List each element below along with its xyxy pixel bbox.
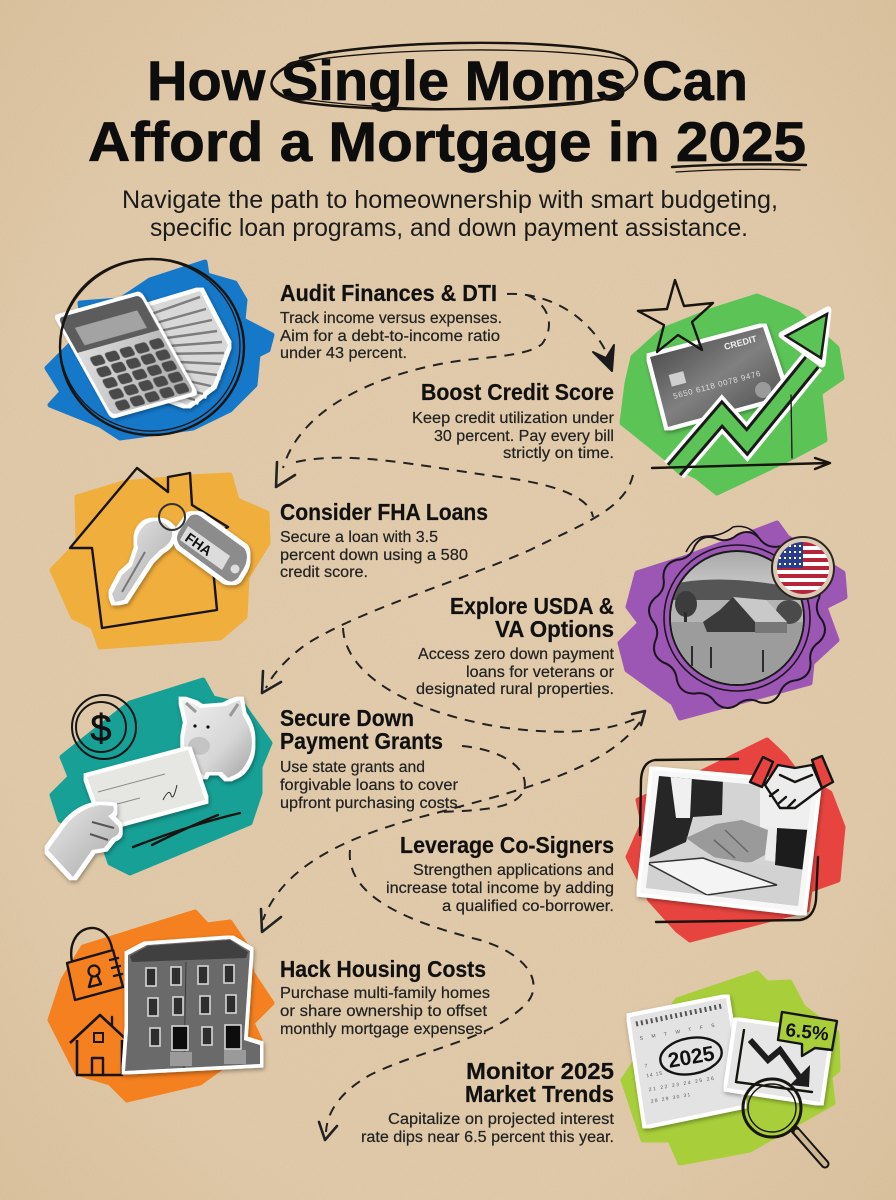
icon: bank check <box>87 750 205 827</box>
panel: step 5 down payment grants <box>48 680 270 877</box>
text: step 5: upfront purchasing costs. <box>280 795 462 812</box>
text: step 1 <box>280 280 502 362</box>
title: Afford a Mortgage in 2025 <box>88 110 806 173</box>
icon: star outline <box>638 280 713 352</box>
text: step 4: VA Options <box>495 616 614 642</box>
text: step 7: or share ownership to offset <box>280 1003 488 1020</box>
text: step 1: Track income versus expenses. <box>280 310 502 327</box>
text: step 2: Keep credit utilization under <box>412 410 614 427</box>
text: step 5: Use state grants and <box>280 759 425 776</box>
chart: falling rate <box>727 1021 830 1102</box>
subtitle: Navigate the path to homeownership with smart budgeting, <box>122 186 778 214</box>
text: step 5: Secure Down <box>280 705 414 731</box>
text: step 4: loans for veterans or <box>466 664 614 681</box>
icon: padlock sketch <box>67 928 123 1000</box>
red paint swatch <box>628 740 843 940</box>
icon: dollar coin: $ <box>90 708 112 750</box>
title <box>88 49 806 173</box>
dashed path: step 7 to step 8 <box>319 850 534 1140</box>
text: step 8: rate dips near 6.5 percent this year. <box>361 1129 614 1146</box>
text: step 8: Monitor 2025 <box>466 1058 614 1084</box>
icon: magnifier <box>743 1079 825 1164</box>
subtitle: specific loan programs, and down payment assistance. <box>150 214 748 242</box>
icon: credit card: CREDIT <box>723 333 758 352</box>
text: step 1: under 43 percent. <box>280 345 407 362</box>
text: step 3: credit score. <box>280 564 368 581</box>
2025 circled: 2025 <box>666 1042 717 1073</box>
text: step 4: Access zero down payment <box>418 646 615 663</box>
panel: step 4 USDA and VA <box>620 523 845 718</box>
icon: credit card <box>650 327 786 427</box>
text: step 5: forgivable loans to cover <box>280 777 458 794</box>
text: step 8: Market Trends <box>465 1081 614 1107</box>
purple paint swatch <box>620 523 845 718</box>
text: step 2 <box>412 379 614 462</box>
text: step 6: Leverage Co-Signers <box>400 832 614 858</box>
text: step 6: a qualified co-borrower. <box>442 898 614 915</box>
icon: calendar: 28 29 30 31 <box>650 1092 691 1105</box>
text: step 4: Explore USDA & <box>450 593 614 619</box>
title scribble: oval around Single Moms <box>271 43 637 109</box>
icon: rising arrow <box>674 310 828 470</box>
icon: cash fan <box>130 291 228 405</box>
text: step 1: Aim for a debt-to-income ratio <box>280 328 500 345</box>
icon: key with FHA tag <box>112 514 247 602</box>
text: step 8 <box>361 1058 615 1146</box>
orange paint swatch <box>50 912 272 1100</box>
dashed path: step 4 to step 5 <box>343 628 645 732</box>
green paint swatch <box>622 296 842 493</box>
text: step 5 <box>280 705 462 812</box>
icon: calendar: S M T W T F S <box>639 1023 716 1042</box>
text: step 4 <box>416 593 615 698</box>
callout: 6.5 percent: 6.5% <box>784 1020 830 1046</box>
sketch strokes <box>133 813 240 847</box>
text: step 6: increase total income by adding <box>386 880 614 897</box>
text: step 8: Capitalize on projected interest <box>388 1111 615 1128</box>
text: step 3: percent down using a 580 <box>280 547 468 564</box>
sketch frame <box>640 759 818 922</box>
dashed path: step 5 to step 6 and 7 <box>261 722 640 932</box>
photo: barn in field <box>669 550 806 690</box>
text: step 7: monthly mortgage expenses. <box>280 1021 487 1038</box>
icon: dollar coin <box>72 695 136 759</box>
text: step 6 <box>386 832 614 915</box>
text: step 2: strictly on time. <box>503 445 614 462</box>
title: How Single Moms Can <box>147 49 748 112</box>
photo: rowhouse building <box>125 939 260 1071</box>
icon: small house sketch <box>70 1015 130 1075</box>
text: step 4: designated rural properties. <box>416 681 614 698</box>
lime paint swatch <box>623 973 838 1163</box>
panel: step 2 boost credit score <box>622 280 842 493</box>
panel: step 3 FHA loans <box>52 468 268 647</box>
icon: calendar: 21 22 23 24 25 26 <box>648 1076 715 1093</box>
text: step 2: Boost Credit Score <box>421 379 614 405</box>
text: step 3: Consider FHA Loans <box>280 499 488 525</box>
icon: US flag badge <box>772 537 834 599</box>
icon: hand <box>48 805 119 877</box>
sketch circle <box>49 247 251 443</box>
dashed path: step 3 to step 4 <box>262 458 633 693</box>
icon: credit card: 5650 6118 0078 9476 <box>672 369 762 401</box>
photo: handshake over contract <box>640 770 820 912</box>
panel: step 1 audit finances <box>47 247 272 443</box>
icon: calendar: 7 <box>644 1063 648 1070</box>
yellow paint swatch <box>52 475 268 647</box>
2025 circled <box>657 1033 725 1079</box>
text: step 2: 30 percent. Pay every bill <box>434 428 614 445</box>
panel: step 6 co-signers <box>628 740 843 940</box>
text: step 3: Secure a loan with 3.5 <box>280 529 438 546</box>
title scribble: underline 2025 <box>672 164 806 172</box>
blue paint swatch <box>47 262 272 438</box>
rosette scribble <box>649 526 825 708</box>
text: step 1: Audit Finances & DTI <box>280 280 497 306</box>
text: step 6: Strengthen applications and <box>413 862 614 879</box>
icon: handshake sketch <box>750 756 833 808</box>
text: step 5: Payment Grants <box>280 728 443 754</box>
text: step 7 <box>280 956 490 1038</box>
icon: house outline <box>70 468 228 628</box>
icon: calendar: 14 15 <box>646 1071 663 1079</box>
icon: calculator <box>58 295 194 415</box>
dashed path: step 2 to step 3 <box>276 295 549 487</box>
text: step 3 <box>280 499 488 581</box>
dashed path: step 1 to step 2 <box>507 294 614 371</box>
panel: step 7 housing costs <box>50 912 272 1100</box>
icon: key with FHA tag: FHA <box>182 529 215 559</box>
icon: calendar <box>630 998 743 1125</box>
text: step 7: Purchase multi-family homes <box>280 985 490 1002</box>
icon: piggy bank <box>182 700 252 778</box>
teal paint swatch <box>52 680 270 873</box>
subtitle <box>122 186 778 242</box>
callout: 6.5 percent <box>778 1012 837 1056</box>
chart axis <box>652 395 830 469</box>
text: step 7: Hack Housing Costs <box>280 956 486 982</box>
panel: step 8 market trends <box>623 973 838 1164</box>
